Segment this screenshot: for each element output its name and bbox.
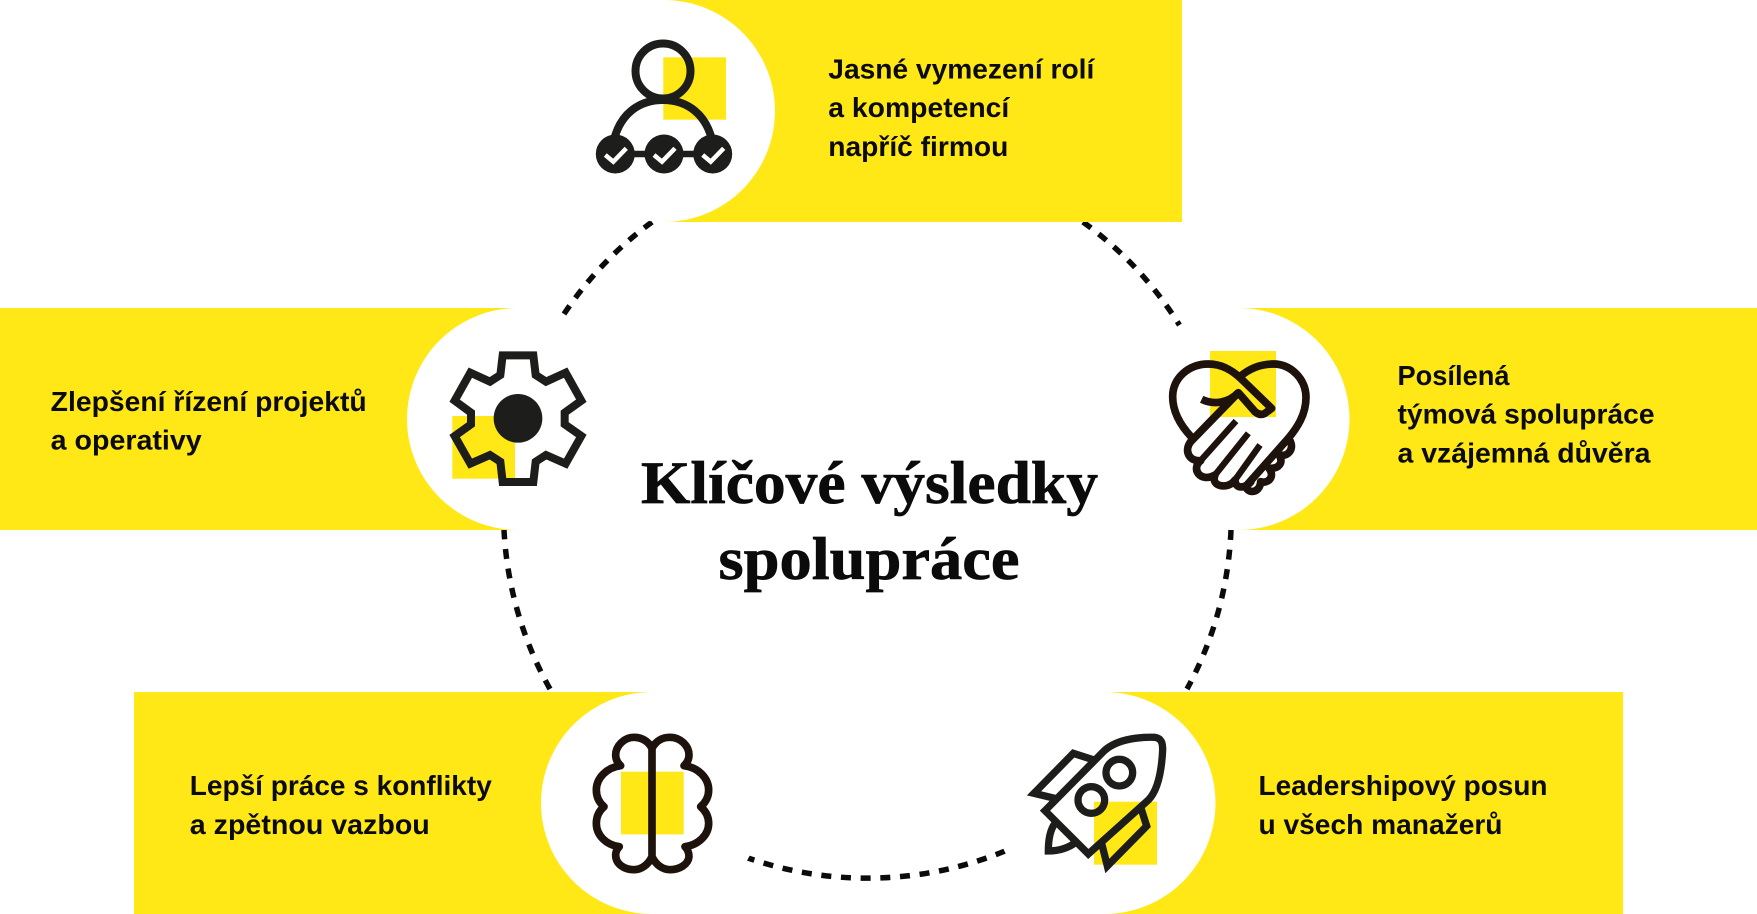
icon: rocket: [1034, 737, 1163, 866]
icon: gear: [452, 355, 581, 482]
icon: brain: [596, 737, 709, 870]
text: project management: [51, 386, 367, 456]
icon: person with three checkmarks: [596, 44, 732, 174]
title: spolupráce: [718, 526, 1020, 592]
text: project management: Zlepšení řízení projektů: [51, 386, 367, 417]
icon: handshake heart: [1173, 351, 1306, 491]
title: Klíčové výsledky: [641, 450, 1098, 516]
text: conflicts and feedback: [190, 770, 492, 840]
text: leadership growth: [1258, 770, 1548, 840]
text: conflicts and feedback: a zpětnou vazbou: [190, 809, 430, 840]
dashed ring connecting the outcomes: [504, 222, 1231, 878]
panel: project management: [0, 308, 629, 530]
panel: clear roles: [553, 0, 1182, 222]
text: clear roles: [828, 54, 1096, 162]
text: project management: a operativy: [51, 424, 202, 456]
panel: conflicts and feedback: [134, 692, 763, 914]
text: teamwork and trust: týmová spolupráce: [1398, 398, 1654, 430]
text: leadership growth: Leadershipový posun: [1258, 770, 1548, 801]
text: teamwork and trust: [1398, 360, 1654, 468]
text: conflicts and feedback: Lepší práce s konflikty: [190, 770, 492, 801]
text: teamwork and trust: Posílená: [1398, 360, 1510, 391]
text: clear roles: Jasné vymezení rolí: [828, 54, 1096, 84]
text: teamwork and trust: a vzájemná důvěra: [1398, 438, 1651, 468]
text: clear roles: napříč firmou: [828, 131, 1008, 162]
panel: teamwork and trust: [1128, 308, 1757, 530]
text: clear roles: a kompetencí: [828, 92, 1011, 123]
text: leadership growth: u všech manažerů: [1258, 809, 1502, 840]
title: [641, 450, 1098, 592]
panel: leadership growth: [994, 692, 1623, 914]
